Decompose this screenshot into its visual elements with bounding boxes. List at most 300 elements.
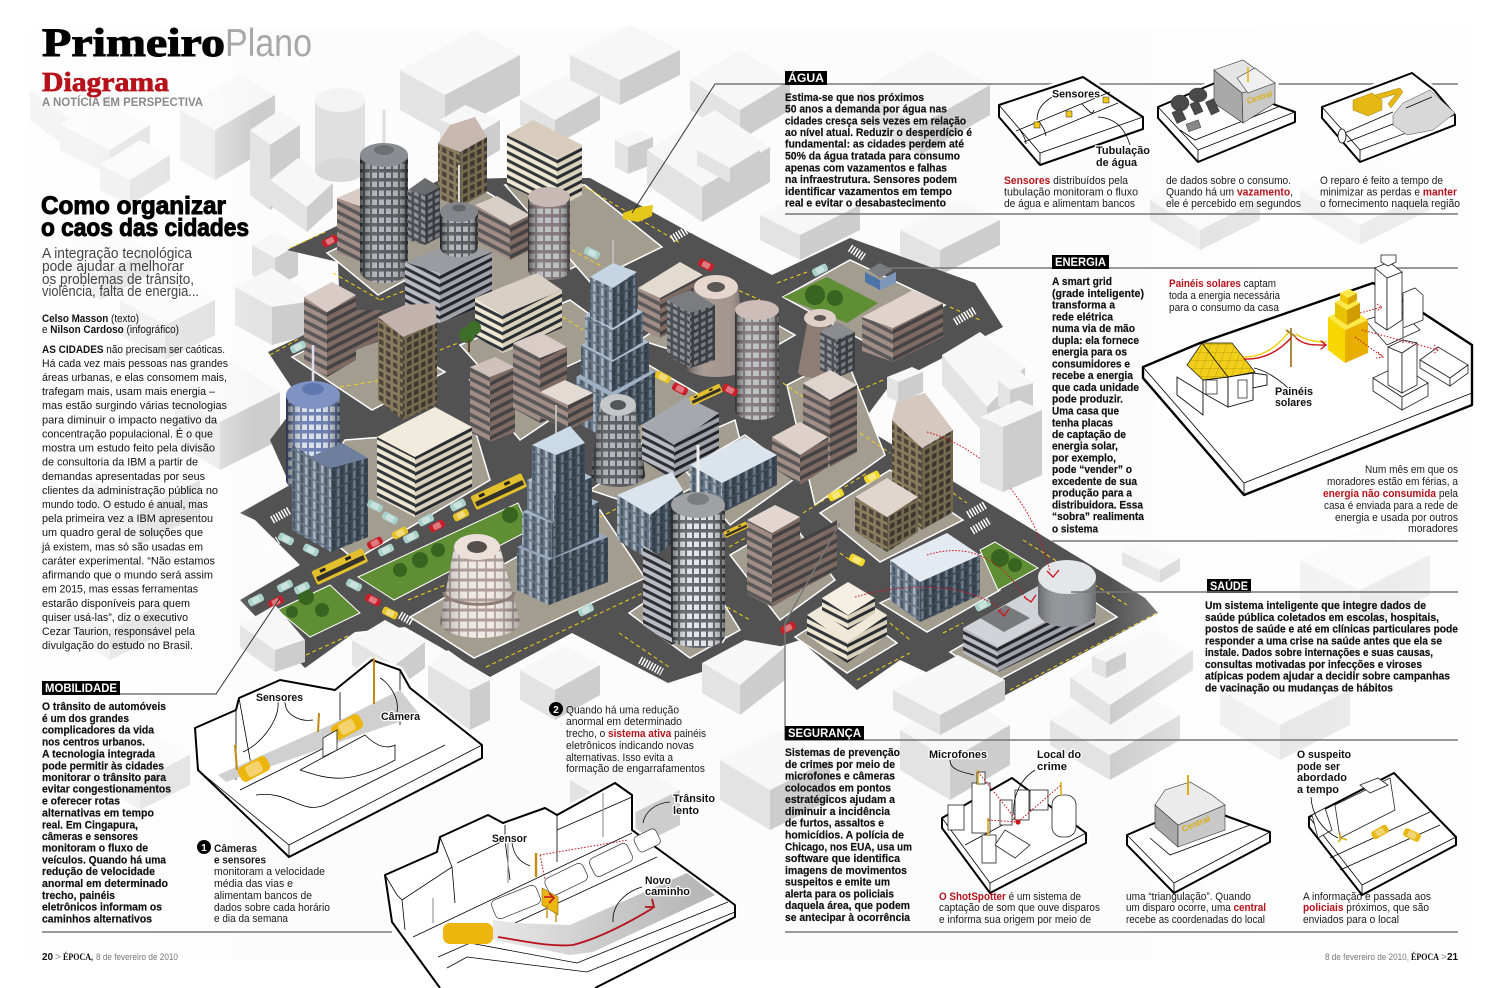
arrows: dotted triangulation [978, 772, 1061, 822]
intro article text: estarão disponíveis para quem [42, 598, 190, 610]
text block: segurança: microfones e câmeras [785, 770, 895, 782]
text block: mobilidade: alternativas em tempo [42, 808, 154, 820]
caption: reparo: minimizar as perdas e manter [1320, 186, 1458, 198]
building: gray block behind tower [408, 178, 440, 245]
subtitle [42, 246, 199, 300]
labels: sensor, trânsito lento, novo caminho [492, 793, 715, 898]
building: gray block by cone [667, 290, 715, 368]
text block: água: na infraestrutura. Sensores podem [785, 174, 957, 186]
red dotted energy arcs [855, 432, 1059, 616]
text block: segurança: Chicago, nos EUA, usa um [785, 842, 912, 854]
intro article text: demandas apresentadas por seus [42, 471, 205, 483]
labels: sensor, trânsito lento, novo caminho: caminho [645, 886, 690, 898]
diagram: smart grid house and city [1143, 255, 1472, 495]
diagram: central building [1127, 775, 1270, 893]
diagram: police cars and suspect [1297, 749, 1456, 895]
label: suspeito [1297, 749, 1351, 796]
caption: sensores: de água e alimentam bancos [1004, 198, 1135, 210]
caption: painéis solares: para o consumo da casa [1169, 302, 1280, 314]
intro article text: de consultoria da IBM a partir de [42, 456, 198, 468]
building: pink low block [862, 290, 943, 362]
text block: mobilidade: monitoram o fluxo de [42, 842, 148, 854]
diagram: sensors on water pipe [999, 77, 1150, 169]
text block: energia [1052, 276, 1145, 536]
icon: white towers [948, 772, 1076, 863]
diagram: central building: Central [1180, 813, 1212, 834]
text block: segurança: diminuir a incidência [785, 806, 891, 818]
caption: ShotSpotter: e informa sua origem por meio de [939, 914, 1091, 926]
text block: energia: Uma casa que [1052, 406, 1119, 418]
intro article text: clientes da administração pública no [42, 485, 218, 497]
text block: energia: produção para a [1052, 488, 1133, 500]
icon: yellow excavator [1353, 88, 1403, 116]
icon: dark machines [1171, 88, 1219, 132]
subtitle: pode ajudar a melhorar [42, 259, 184, 275]
text block: segurança [785, 747, 912, 924]
callout 2: sistema ativa: eletrônicos indicando novas [566, 740, 694, 752]
text block: mobilidade: veículos. Quando há uma [42, 854, 167, 866]
text block: energia: distribuidora. Essa [1052, 500, 1144, 512]
text block: energia: numa via de mão [1052, 323, 1135, 335]
diagram: data centre: Central [1246, 88, 1273, 106]
intro article text: em 2015, mas essas ferramentas [42, 584, 198, 596]
building: pale blue flat left [617, 472, 683, 560]
labels: sensores and tubulação: de água [1096, 157, 1138, 169]
building: tall tan tower [378, 303, 437, 420]
text block: mobilidade: trecho, painéis [42, 890, 115, 902]
labels: sensores and tubulação [1052, 88, 1150, 169]
callout 2: sistema ativa: alternativas. Isso evita a [566, 752, 674, 764]
building: pink cone tower [684, 275, 748, 377]
text block: mobilidade: nos centros urbanos. [42, 736, 145, 748]
labels: microfones and local do crime: Local do [1037, 749, 1081, 761]
label: suspeito: abordado [1297, 772, 1347, 784]
building: small cone and gray block [798, 309, 855, 378]
heading tag: água: ÁGUA [788, 70, 824, 85]
labels: sensores and tubulação: Sensores [1052, 88, 1100, 100]
text block: energia: por exemplo, [1052, 452, 1116, 464]
text block: mobilidade: O trânsito de automóveis [42, 701, 166, 713]
building: pink block with wing [304, 282, 382, 377]
intro article text: concentração populacional. É o que [42, 428, 213, 440]
text block: segurança: homicídios. A polícia de [785, 830, 904, 842]
icon: suspect figure [1338, 833, 1347, 842]
building: blue cylinder tower with glass wing [286, 345, 368, 552]
callout 2: sistema ativa: Quando há uma redução [566, 704, 679, 716]
heading tag: saúde: SAÚDE [1210, 578, 1248, 593]
caption: energia não consumida: Num mês em que os [1365, 464, 1458, 476]
buildings: right district [772, 263, 953, 552]
icon: sensor and camera poles [235, 658, 374, 770]
text block: água: 50 anos a demanda por água nas [785, 104, 947, 116]
text block: mobilidade: anormal em determinado [42, 878, 168, 890]
text block: mobilidade: é um dos grandes [42, 713, 129, 725]
lamp posts [433, 793, 603, 923]
caption: ShotSpotter [939, 891, 1100, 926]
text block: energia: tenha placas [1052, 418, 1113, 430]
callout 2: sistema ativa: anormal em determinado [566, 716, 682, 728]
caption: vazamento: ele é percebido em segundos [1166, 198, 1301, 210]
callout 2: sistema ativa [549, 702, 706, 775]
footer right: 8 de fevereiro de 2010, [1325, 952, 1409, 962]
callout 1: câmeras e sensores [197, 840, 330, 925]
diagram: traffic diverted to new route [385, 783, 735, 988]
text block: energia: pode produzir. [1052, 394, 1123, 406]
text block: mobilidade [42, 701, 171, 926]
intro article text: divulgação do estudo no Brasil. [42, 640, 193, 652]
footer right: > [1441, 952, 1447, 963]
icon: yellow excavator on road [623, 205, 653, 222]
building: cream stepped block [807, 582, 887, 663]
caption: painéis solares: Painéis solares captam [1169, 278, 1276, 290]
building: small gray cylinder [440, 165, 478, 257]
diagram: street with cameras and sensors [195, 658, 482, 857]
footer left: > [55, 952, 61, 963]
caption: sensores: tubulação monitoram o fluxo [1004, 186, 1138, 198]
building: small blue house [865, 263, 896, 290]
text block: energia: recebe a energia [1052, 370, 1134, 382]
text block: energia: energia para os [1052, 346, 1127, 358]
building: tan tower with sloped roof [438, 117, 487, 207]
building: gray block by cylinder [643, 545, 680, 645]
caption: ShotSpotter: captação de som que ouve disparos [939, 902, 1100, 914]
text block: mobilidade: A tecnologia integrada [42, 748, 156, 760]
building: pink block left [337, 188, 385, 262]
building: cream striped slab front [377, 407, 472, 517]
text block: segurança: se antecipar à ocorrência [785, 912, 911, 924]
title: Como organizar [41, 192, 226, 220]
credits: Celso Masson (texto) [42, 313, 139, 325]
intro article text: já existem, mas só são usadas em [41, 542, 203, 554]
caption: central: um disparo ocorre, uma central [1126, 902, 1266, 914]
building: striped cream block [507, 120, 582, 208]
labels: sensor, trânsito lento, novo caminho: Sensor [492, 833, 528, 845]
caption: reparo: o fornecimento naquela região [1320, 198, 1460, 210]
caption: policiais [1303, 891, 1431, 926]
intro article text: quiser usá-las”, diz o executivo [42, 612, 188, 624]
icon: yellow cars [236, 754, 272, 784]
intro article text: trafegam mais, usam mais energia – [42, 386, 216, 398]
panel: saúde [1205, 578, 1458, 694]
caption: energia não consumida: energia não consumida pela [1323, 488, 1459, 500]
labels: sensor, trânsito lento, novo caminho: Trânsito [673, 793, 715, 805]
icon: white stepped tower [1373, 340, 1468, 410]
text block: segurança: alerta para os policiais [785, 888, 894, 900]
footer left [42, 952, 178, 963]
text block: energia: rede elétrica [1052, 312, 1114, 324]
caption: energia não consumida: casa é enviada para a rede de [1324, 500, 1458, 512]
labels: sensores and tubulação: Tubulação [1096, 145, 1150, 157]
text block: energia: excedente de sua [1052, 476, 1138, 488]
text block: saúde: de vacinação ou mudanças de hábitos [1205, 682, 1393, 694]
caption: energia não consumida: moradores [1408, 523, 1458, 535]
diagram: microphones on city block [929, 749, 1086, 893]
label: painéis solares: Painéis [1275, 386, 1313, 398]
label: suspeito: O suspeito [1297, 749, 1351, 761]
footer left: 8 de fevereiro de 2010 [96, 952, 178, 962]
text block: saúde: postos de saúde e até em clínicas particulares pode [1205, 624, 1458, 636]
intro article text: Há cada vez mais pessoas nas grandes [42, 358, 228, 370]
intro article text: mas estão surgindo várias tecnologias [42, 400, 227, 412]
city ground and road network [240, 178, 1158, 698]
intro article text: áreas urbanas, e elas consomem mais, [42, 372, 227, 384]
building: pale blue cube [890, 533, 980, 622]
callout 2: sistema ativa: formação de engarrafamentos [566, 763, 705, 775]
text block: saúde: responder a uma crise na saúde antes que ela se [1205, 636, 1442, 648]
building: pink block j [513, 332, 593, 430]
caption: policiais: enviados para o local [1303, 914, 1399, 926]
divider line saúde [1207, 591, 1458, 593]
caption: policiais: A informação é passada aos [1303, 891, 1431, 903]
labels: sensores and câmera: Sensores [256, 692, 303, 704]
text block: energia: consumidores e [1052, 358, 1130, 370]
caption: central: uma “triangulação”. Quando [1126, 891, 1251, 903]
building: green tree cluster near slab [459, 321, 481, 352]
caption: painéis solares [1169, 278, 1281, 314]
foreground white blocks [240, 332, 1193, 735]
text block: água: apenas com vazamentos e falhas [785, 162, 947, 174]
panel: segurança [785, 726, 1458, 932]
divider line água [785, 84, 1458, 214]
masthead: Primeiro Plano: Plano [225, 22, 312, 65]
section heading: Diagrama: Diagrama [42, 67, 170, 97]
text block: mobilidade: redução de velocidade [42, 866, 155, 878]
building: low tan [475, 196, 530, 260]
labels: microfones and local do crime [929, 749, 1081, 773]
building: pale blue flat right [690, 437, 777, 513]
title: o caos das cidades [41, 214, 249, 242]
text block: água: Estima-se que nos próximos [785, 92, 924, 104]
leader lines [120, 84, 1207, 740]
divider line segurança [785, 740, 1458, 932]
callout 2: sistema ativa: trecho, o sistema ativa painéis [566, 728, 706, 740]
label: suspeito: a tempo [1297, 784, 1339, 796]
caption: central [1126, 891, 1266, 926]
building: blue stepped glass tower 2 [517, 405, 608, 605]
icon: power pole [1286, 328, 1296, 367]
icon: yellow car [443, 923, 493, 944]
text block: água: identificar vazamentos em tempo [785, 186, 952, 198]
text block: mobilidade: e oferecer rotas [42, 796, 120, 808]
text block: segurança: de crimes por meio de [785, 759, 895, 771]
callout 1: câmeras e sensores: e dia da semana [214, 913, 289, 925]
building: white cone tower [440, 534, 520, 638]
icon: white skyscraper [1365, 255, 1423, 345]
caption: energia não consumida [1323, 464, 1459, 535]
building: pink block v [747, 505, 837, 607]
text block: energia: de captação de [1052, 429, 1126, 441]
text block: água: real e evitar o desabastecimento [785, 198, 946, 210]
intro article text: afirmando que o mundo será assim [42, 570, 213, 582]
text block: mobilidade: real. Em Cingapura, [42, 820, 138, 832]
panel: energia [1052, 255, 1472, 541]
text block: energia: (grade inteligente) [1052, 288, 1144, 300]
panel: mobilidade [42, 658, 735, 988]
caption: central: recebe as coordenadas do local [1126, 914, 1265, 926]
label: painéis solares: solares [1275, 397, 1312, 409]
building: gray striped slab [405, 241, 492, 323]
panel: água [785, 60, 1460, 214]
caption: ShotSpotter: O ShotSpotter é um sistema de [939, 891, 1081, 903]
text block: saúde: Um sistema inteligente que integre dados de [1205, 600, 1426, 612]
credits: e Nilson Cardoso (infográfico) [42, 324, 179, 336]
divider line energia [1052, 268, 1458, 541]
text block: saúde: saúde pública coletados em escolas, hospitais, [1205, 612, 1439, 624]
building: cream striped slab [475, 273, 562, 353]
caption: vazamento: de dados sobre o consumo. [1166, 175, 1291, 187]
callout 1: câmeras e sensores: dados sobre cada horário [214, 902, 330, 914]
diagram: data centre [1158, 60, 1295, 162]
icon: police cars [1370, 824, 1390, 840]
text block: água [785, 92, 972, 210]
text block: energia: energia solar, [1052, 440, 1118, 452]
caption: energia não consumida: energia e usada por outros [1335, 512, 1458, 524]
text block: mobilidade: eletrônicos informam os [42, 902, 162, 914]
intro article text [41, 344, 228, 652]
caption: painéis solares: toda a energia necessária [1169, 290, 1281, 302]
icon: outline cars in jam [490, 828, 662, 920]
text block: saúde: atípicas podem ajudar a decidir sobre campanhas [1205, 670, 1450, 682]
heading tag: mobilidade: MOBILIDADE [45, 681, 117, 695]
text block: segurança: estratégicos ajudam a [785, 794, 896, 806]
buildings: central district [591, 394, 1096, 672]
subtitle: os problemas de trânsito, [42, 272, 194, 288]
footer left: ÉPOCA, [63, 952, 93, 962]
text block: segurança: imagens de movimentos [785, 865, 907, 877]
text block: água: 50% da água tratada para consumo [785, 150, 960, 162]
divider line mobilidade [42, 931, 392, 933]
text block: mobilidade: caminhos alternativos [42, 914, 152, 926]
park trees [286, 285, 1022, 618]
building: gray cylinder front [671, 445, 725, 648]
callout 1: câmeras e sensores: média das vias e [214, 878, 293, 890]
arrows: red dotted to towers [1355, 304, 1438, 358]
callout 2: sistema ativa: 2 [553, 705, 559, 716]
text block: mobilidade: pode permitir às cidades [42, 760, 164, 772]
text block: água: ao nível atual. Reduzir o desperdício é [785, 127, 972, 139]
intro article text: pela primeira vez a IBM apresentou [42, 513, 213, 525]
labels: microfones and local do crime: crime [1037, 761, 1067, 773]
caption: policiais: policiais próximos, que são [1303, 902, 1429, 914]
building: low tan with white roof [638, 262, 703, 338]
masthead: Primeiro Plano [42, 20, 312, 65]
text block: água: fundamental: as cidades perdem até [785, 138, 964, 150]
caption: sensores [1004, 175, 1138, 210]
text block: energia: transforma a [1052, 300, 1116, 312]
building: blue stepped glass tower 1 [576, 240, 655, 442]
caption: reparo: O reparo é feito a tempo de [1320, 175, 1443, 187]
intro article text: mostra um estudo feito pela divisão [42, 442, 215, 454]
caption: sensores: Sensores distribuídos pela [1004, 175, 1129, 187]
caption: energia não consumida: moradores estão em férias, a [1327, 476, 1459, 488]
caption: vazamento [1166, 175, 1301, 210]
text block: água: cidades cresça seis vezes em relação [785, 116, 966, 128]
labels: sensor, trânsito lento, novo caminho: Novo [645, 875, 671, 887]
icon: house with solar panels [1177, 343, 1267, 415]
subtitle: violência, falta de energia... [42, 284, 199, 300]
credits [42, 313, 179, 336]
text block: saúde: consultas motivadas por infecções e viroses [1205, 659, 1422, 671]
heading tag: segurança: SEGURANÇA [788, 726, 861, 740]
intro article text: caráter experimental. “Não estamos [42, 556, 215, 568]
traffic: cars and buses [247, 234, 992, 635]
footer right: ÉPOCA [1411, 952, 1439, 962]
labels: sensores and câmera [256, 692, 421, 723]
text block: saúde [1205, 600, 1458, 694]
text block: segurança: suspeitos e emite um [785, 876, 890, 888]
caption: vazamento: Quando há um vazamento, [1166, 186, 1293, 198]
intro article text: um quadro geral de soluções que [42, 527, 203, 539]
callout 1: câmeras e sensores: monitoram a velocidade [214, 866, 325, 878]
caption: reparo [1320, 175, 1460, 210]
callout 1: câmeras e sensores: Câmeras [214, 843, 257, 855]
label: suspeito: pode ser [1297, 761, 1341, 773]
text block: mobilidade: complicadores da vida [42, 724, 155, 736]
building: rounded pink tower [528, 187, 570, 280]
intro article text: AS CIDADES não precisam ser caóticas. [42, 344, 225, 356]
subtitle: A integração tecnológica [42, 246, 193, 262]
text block: segurança: Sistemas de prevenção [785, 747, 900, 759]
text block: saúde: instale. Dados sobre internações e suas causas, [1205, 647, 1433, 659]
building: pink round tower right [735, 300, 779, 420]
text block: segurança: daquela área, que podem [785, 900, 910, 912]
intro article text: Cezar Taurion, responsável pela [42, 626, 196, 638]
icon: sensor pole and sign [535, 853, 537, 877]
labels: sensores and câmera: Câmera [381, 711, 421, 723]
label: painéis solares [1275, 386, 1313, 409]
diagram: pipe repair with excavator [1322, 73, 1455, 162]
text block: segurança: colocados em pontos [785, 782, 891, 794]
labels: microfones and local do crime: Microfones [929, 749, 987, 761]
text block: segurança: software que identifica [785, 853, 901, 865]
building: gray flat with round tower (Saúde) [963, 560, 1096, 672]
icon: yellow tower [1328, 289, 1368, 363]
building: pink tall with low wing [772, 370, 857, 485]
callout 1: câmeras e sensores: alimentam bancos de [214, 890, 312, 902]
footer right: 21 [1447, 952, 1459, 963]
new path road [493, 873, 715, 955]
building: low gray flat [642, 397, 719, 480]
text block: mobilidade: monitorar o trânsito para [42, 772, 167, 784]
building: gray cylinder tower [360, 110, 408, 283]
building: tan tower with slope roof [855, 393, 953, 552]
text block: energia: dupla: ela fornece [1052, 335, 1139, 347]
text block: mobilidade: câmeras e sensores [42, 831, 138, 843]
text block: mobilidade: evitar congestionamentos [42, 784, 171, 796]
building: gray cone tower [591, 394, 645, 487]
section heading: Diagrama: A NOTÍCIA EM PERSPECTIVA [42, 94, 203, 109]
text block: energia: que cada unidade [1052, 382, 1139, 394]
masthead: Primeiro Plano: Primeiro [42, 20, 225, 65]
section heading: Diagrama [42, 67, 203, 109]
text block: energia: o sistema [1052, 524, 1099, 536]
labels: sensor, trânsito lento, novo caminho: lento [673, 805, 699, 817]
callout 1: câmeras e sensores: e sensores [214, 854, 266, 866]
title [41, 192, 249, 242]
intro article text: para diminuir o impacto negativo da [42, 414, 218, 426]
text block: segurança: de furtos, assaltos e [785, 818, 884, 830]
intro article text: mundo todo. O estudo é anual, mas [42, 499, 208, 511]
text block: energia: “sobra” realimenta [1052, 511, 1145, 523]
buildings: back row [304, 110, 779, 442]
footer left: 20 [42, 952, 54, 963]
callout 1: câmeras e sensores: 1 [201, 843, 207, 854]
text block: energia: A smart grid [1052, 276, 1112, 288]
building: pink tower i [470, 357, 515, 442]
buildings: front left district [247, 205, 1059, 648]
arrows: energy flow [1244, 333, 1326, 359]
heading tag: energia: ENERGIA [1055, 255, 1106, 269]
